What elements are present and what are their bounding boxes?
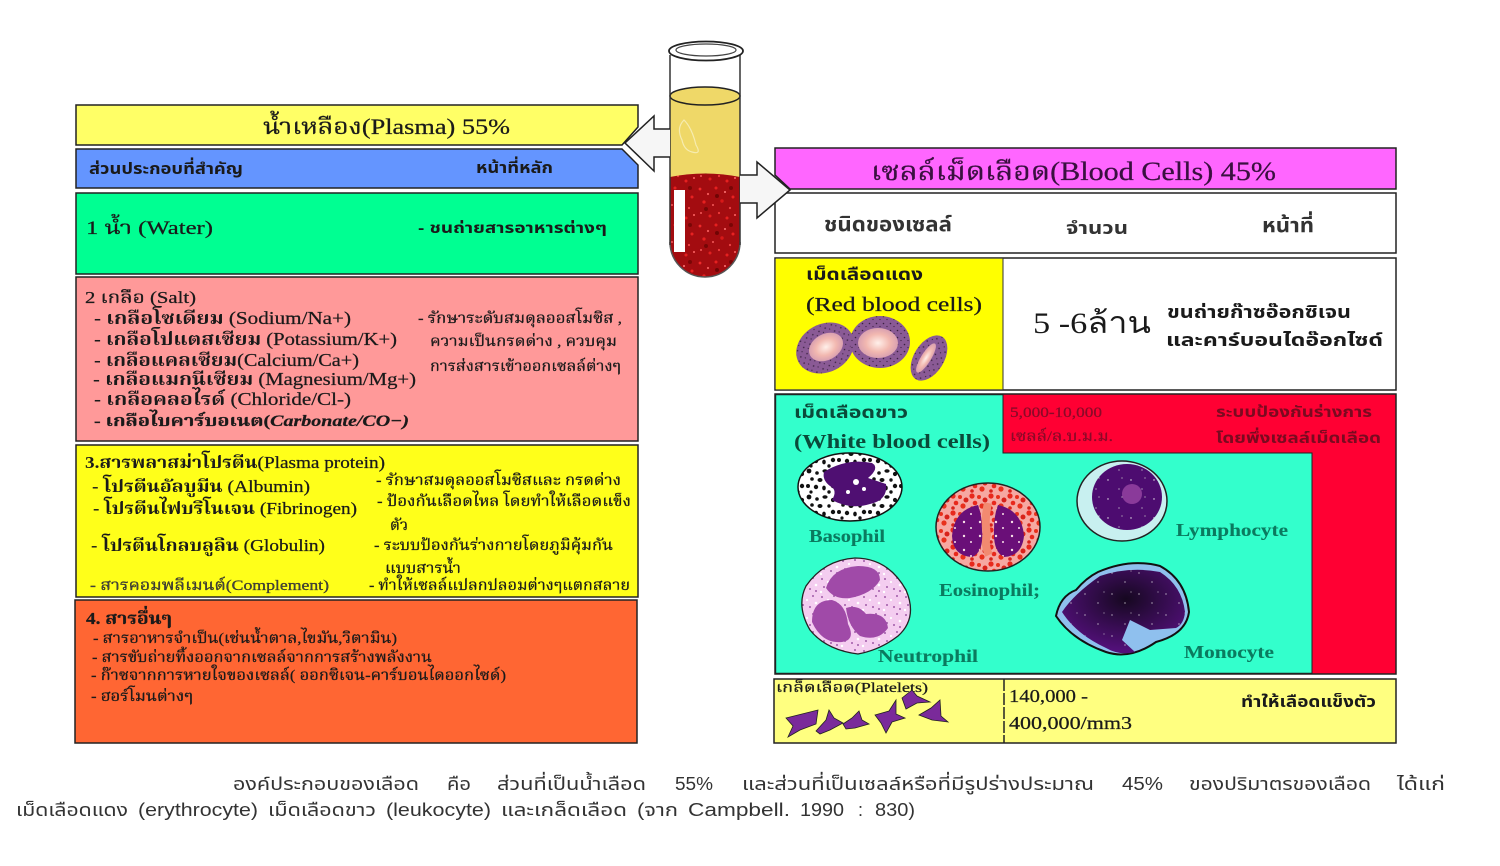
caption: 55% [675, 774, 713, 794]
row: platelets: ทำให้เลือดแข็งตัว [1241, 693, 1376, 711]
caption: 45% [1122, 774, 1163, 794]
table header: cell columns [775, 193, 1396, 253]
icon: eosinophil [936, 483, 1040, 571]
row: salt: - เกลือแคลเซียม (Calcium/Ca+) [94, 350, 359, 371]
row: other substances: - สารขับถ่ายทิ้งออกจากเซลล์จากการสร้างพลังงาน [92, 646, 432, 666]
row: salt: - เกลือโปแตสเซียม (Potassium/K+) [94, 327, 397, 350]
row: salt: - เกลือคลอไรด์ (Chloride/Cl-) [94, 387, 351, 410]
row: red blood cells: (Red blood cells) [806, 294, 982, 316]
label: neutrophil: Neutrophil [878, 646, 978, 666]
row: platelets: 140,000 - [1009, 686, 1088, 706]
icon: basophil [798, 453, 902, 521]
caption: คือ [447, 774, 471, 794]
row: platelets [774, 679, 1396, 743]
row: plasma protein: - ทำให้เซลล์แปลกปลอมต่างๆแตกสลาย [369, 574, 630, 594]
label: lymphocyte: Lymphocyte [1176, 520, 1288, 540]
row: white blood cells [775, 394, 1396, 674]
caption: ส่วนที่เป็นน้ำเลือด [497, 771, 646, 794]
table header: plasma columns: หน้าที่หลัก [476, 156, 553, 177]
caption: เม็ดเลือดแดง [16, 800, 128, 820]
heading: blood cells 45% [775, 148, 1396, 189]
icon: neutrophil [802, 558, 910, 654]
caption: (leukocyte) [386, 800, 491, 820]
row: other substances: - ก๊าซจากการหายใจของเซลล์( ออกซิเจน-คาร์บอนไดออกไซด์) [91, 664, 506, 684]
row: plasma protein: - ป้องกันเลือดไหล โดยทำให้เลือดแข็ง [377, 490, 631, 510]
row: red blood cells: ขนถ่ายก๊าซอ๊อกซิเจน [1167, 302, 1351, 322]
icon: platelet drawings [786, 690, 948, 737]
row: salt: การส่งสารเข้าออกเซลล์ต่างๆ [430, 356, 621, 375]
label: basophil: Basophil [809, 526, 885, 546]
heading: plasma 55% [76, 105, 638, 145]
caption: : [858, 800, 863, 820]
row: salt: ความเป็นกรดด่าง , ควบคุม [430, 332, 617, 352]
icon: test tube of blood [669, 42, 743, 277]
row: other substances [75, 600, 637, 743]
caption: ได้แก่ [1396, 774, 1445, 794]
row: plasma protein: - รักษาสมดุลออสโมซิสและ กรดด่าง [376, 469, 621, 491]
row: red blood cells: และคาร์บอนไดอ๊อกไซด์ [1166, 330, 1383, 350]
caption: และส่วนที่เป็นเซลล์หรือที่มีรูปร่างประมาณ [742, 771, 1094, 796]
table header: plasma columns: ส่วนประกอบที่สำคัญ [89, 157, 243, 178]
row: plasma protein: แบบสารน้ำ [385, 557, 461, 577]
arrow: to plasma [625, 116, 670, 171]
caption: (erythrocyte) [138, 800, 258, 820]
row: plasma protein: ตัว [390, 517, 408, 534]
row: other substances: 4. สารอื่นๆ [86, 606, 172, 628]
panel: blood cells [774, 148, 1396, 743]
row: red blood cells: เม็ดเลือดแดง [806, 264, 923, 284]
row: plasma protein: - สารคอมพลีเมนต์(Complement) [90, 575, 329, 594]
arrow: to blood cells [740, 162, 790, 218]
label: eosinophil: Eosinophil; [939, 580, 1040, 600]
row: other substances: - ฮอร์โมนต่างๆ [91, 685, 193, 705]
row: plasma protein [76, 445, 638, 597]
row: platelets: เกล็ดเลือด(Platelets) [776, 679, 928, 696]
table header: cell columns: จำนวน [1066, 218, 1128, 238]
row: red blood cells: 5 -6ล้าน [1033, 307, 1151, 340]
row: plasma protein: - ระบบป้องกันร่างกายโดยภูมิคุ้มกัน [374, 534, 613, 556]
row: white blood cells: โดยพึ่งเซลล์เม็ดเลือด [1216, 427, 1381, 447]
row: plasma protein: - โปรตีนอัลบูมีน (Albumin) [92, 474, 310, 497]
icon: monocyte [1056, 563, 1189, 654]
caption: และเกล็ดเลือด [501, 800, 627, 820]
caption: Campbell. [688, 800, 790, 820]
caption: (จาก [637, 800, 678, 820]
caption: เม็ดเลือดขาว [268, 800, 376, 820]
row: salt [76, 277, 638, 441]
row: salt: 2 เกลือ (Salt) [85, 288, 196, 307]
table header: cell columns: หน้าที่ [1262, 211, 1314, 237]
panel: plasma [75, 105, 638, 743]
row: plasma protein: - โปรตีนไฟบริโนเจน (Fibrinogen) [93, 496, 357, 518]
caption: 830) [875, 800, 915, 820]
row: red blood cells [775, 258, 1396, 390]
row: salt: - เกลือไบคาร์บอเนต( Carbonate/CO−) [94, 410, 409, 430]
row: plasma protein: 3.สารพลาสม่าโปรตีน (Plasma protein) [85, 450, 385, 472]
caption: องค์ประกอบของเลือด [233, 774, 419, 794]
table header: cell columns: ชนิดของเซลล์ [824, 214, 952, 236]
caption [16, 771, 1445, 820]
heading: plasma 55%: น้ำเหลือง(Plasma) 55% [263, 110, 510, 139]
icon: lymphocyte [1077, 461, 1167, 541]
row: water: - ชนถ่ายสารอาหารต่างๆ [418, 219, 607, 237]
heading: blood cells 45%: เซลล์เม็ดเลือด(Blood Cells) 45% [871, 155, 1276, 186]
caption: ของปริมาตรของเลือด [1189, 774, 1371, 794]
caption: 1990 [800, 800, 844, 820]
icon: red blood cell drawings [787, 313, 955, 387]
row: white blood cells: เซลล์/ล.บ.ม.ม. [1010, 426, 1113, 445]
row: salt: - เกลือโซเดียม (Sodium/Na+) [94, 306, 351, 329]
row: salt: - เกลือแมกนีเซียม (Magnesium/Mg+) [93, 369, 416, 390]
row: plasma protein: - โปรตีนโกลบลูลิน (Globulin) [91, 533, 325, 556]
row: white blood cells: (White blood cells) [794, 431, 990, 453]
table header: plasma columns [76, 149, 638, 188]
row: water [76, 193, 638, 274]
row: white blood cells: 5,000-10,000 [1010, 405, 1102, 421]
row: platelets: 400,000/mm3 [1009, 713, 1132, 733]
row: white blood cells: เม็ดเลือดขาว [794, 402, 908, 422]
row: white blood cells: ระบบป้องกันร่างการ [1216, 403, 1372, 421]
row: water: 1 น้ำ (Water) [86, 213, 213, 239]
row: salt: - รักษาระดับสมดุลออสโมซิส , [418, 307, 622, 329]
row: other substances: - สารอาหารจำเป็น(เช่นน้ำตาล,ไขมัน,วิตามิน) [93, 627, 397, 647]
label: monocyte: Monocyte [1184, 642, 1274, 662]
